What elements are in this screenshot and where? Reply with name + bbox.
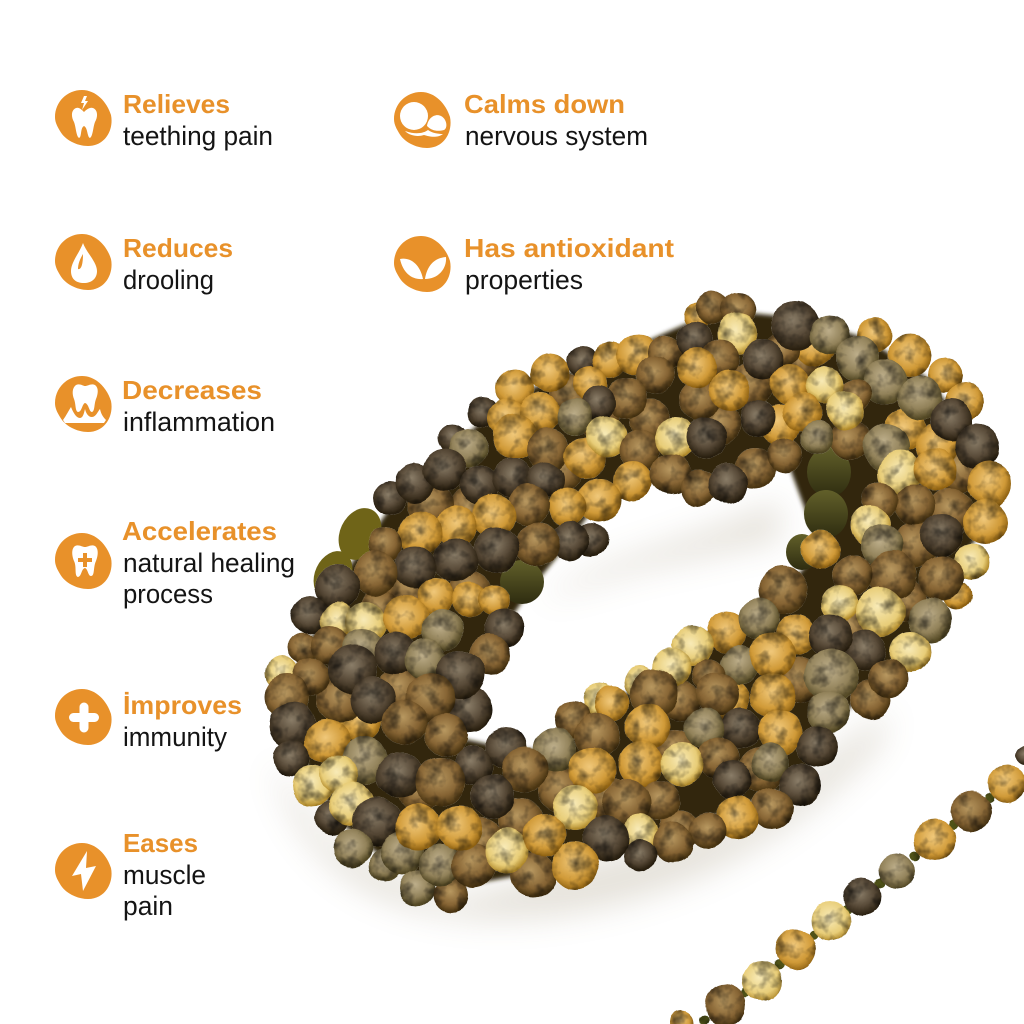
heading and text: decreases inflammation: inflammation	[123, 407, 275, 437]
heading and text: reduces drooling	[123, 233, 233, 295]
heading and text: improves immunity: İmproves	[123, 690, 242, 720]
icon: plus	[55, 689, 112, 745]
heading and text: eases muscle pain	[123, 828, 206, 921]
amber bead bracelet	[267, 294, 1010, 910]
heading and text: improves immunity: immunity	[123, 722, 227, 752]
icon: sleeping baby	[394, 92, 451, 148]
icon: two leaves	[394, 236, 451, 292]
bracelet underlay	[288, 312, 985, 888]
heading and text: calms down nervous system	[464, 89, 648, 151]
heading and text: calms down nervous system: nervous system	[465, 121, 648, 151]
icon: tooth in gum	[55, 376, 112, 432]
heading and text: has antioxidant properties	[464, 233, 674, 295]
heading and text: eases muscle pain: Eases	[123, 828, 198, 858]
heading and text: accelerates natural healing process: Accelerates	[122, 516, 277, 546]
icon: lightning bolt	[55, 843, 112, 899]
back layer of filler beads	[320, 342, 980, 860]
heading and text: accelerates natural healing process	[122, 516, 295, 609]
olive clasp beads	[306, 447, 851, 605]
heading and text: relieves teething pain	[123, 89, 273, 151]
heading and text: decreases inflammation	[122, 375, 275, 437]
icon: drop	[55, 234, 112, 290]
heading and text: relieves teething pain: teething pain	[123, 121, 273, 151]
single amber strand	[670, 747, 1024, 1024]
heading and text: calms down nervous system: Calms down	[464, 89, 625, 119]
heading and text: has antioxidant properties: properties	[465, 265, 583, 295]
heading and text: accelerates natural healing process: process	[123, 579, 213, 609]
heading and text: relieves teething pain: Relieves	[123, 89, 230, 119]
heading and text: has antioxidant properties: Has antioxidant	[464, 233, 674, 263]
heading and text: eases muscle pain: pain	[123, 891, 173, 921]
heading and text: reduces drooling: drooling	[123, 265, 214, 295]
shadow beneath bracelet	[272, 500, 890, 919]
icon: tooth with pain bolt	[55, 90, 112, 146]
heading and text: reduces drooling: Reduces	[123, 233, 233, 263]
heading and text: eases muscle pain: muscle	[123, 860, 206, 890]
heading and text: improves immunity	[123, 690, 242, 752]
icon: tooth with plus	[55, 533, 112, 589]
heading and text: accelerates natural healing process: natural healing	[123, 548, 295, 578]
heading and text: decreases inflammation: Decreases	[122, 375, 262, 405]
